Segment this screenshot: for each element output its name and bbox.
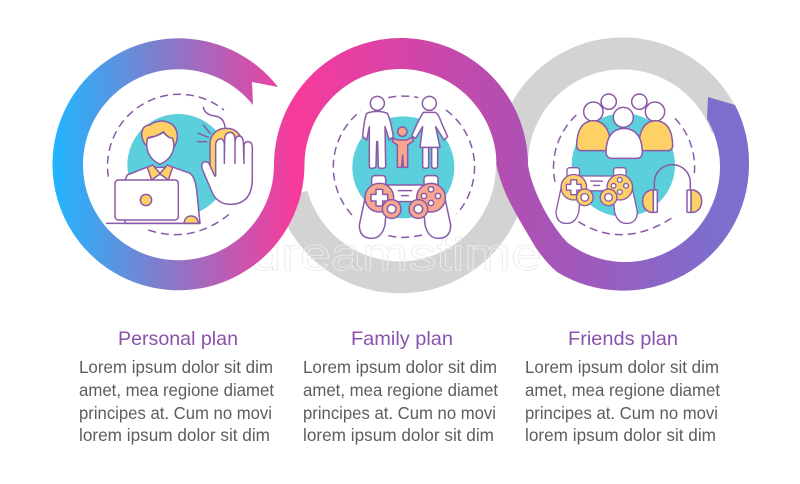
body: personal plan: principes at. Cum no movi [79, 403, 272, 423]
woman [412, 96, 448, 168]
heading: family plan: Family plan [351, 328, 453, 350]
body: personal plan: amet, mea regione diamet [79, 380, 274, 400]
gamepad [556, 168, 637, 223]
text block: family plan [303, 328, 498, 445]
child [393, 127, 413, 167]
body: personal plan: lorem ipsum dolor sit dim [79, 425, 270, 445]
gamepad [359, 176, 451, 238]
icon: person at laptop with mouse [107, 94, 252, 235]
body: family plan: Lorem ipsum dolor sit dim [303, 357, 497, 377]
body: family plan: lorem ipsum dolor sit dim [303, 425, 494, 445]
body: friends plan: amet, mea regione diamet [525, 380, 720, 400]
watermark: dreamstime [250, 228, 542, 280]
body: friends plan: Lorem ipsum dolor sit dim [525, 357, 719, 377]
gray ribbon [292, 53, 727, 277]
body: friends plan [525, 357, 720, 445]
heading: personal plan: Personal plan [118, 328, 238, 350]
body: family plan [303, 357, 498, 445]
body: personal plan: Lorem ipsum dolor sit dim [79, 357, 273, 377]
heading: friends plan: Friends plan [568, 328, 678, 350]
text block: friends plan [525, 328, 720, 445]
body: friends plan: principes at. Cum no movi [525, 403, 718, 423]
body: personal plan [79, 357, 274, 445]
body: friends plan: lorem ipsum dolor sit dim [525, 425, 716, 445]
headphones [643, 165, 702, 212]
text block: personal plan [79, 328, 274, 445]
body: family plan: amet, mea regione diamet [303, 380, 498, 400]
icon: friends, gamepad and headphones [554, 94, 702, 235]
body: family plan: principes at. Cum no movi [303, 403, 496, 423]
man [363, 96, 393, 168]
icon: family and gamepad [333, 96, 475, 238]
gradient ribbon [53, 38, 749, 291]
friends group [577, 94, 673, 158]
